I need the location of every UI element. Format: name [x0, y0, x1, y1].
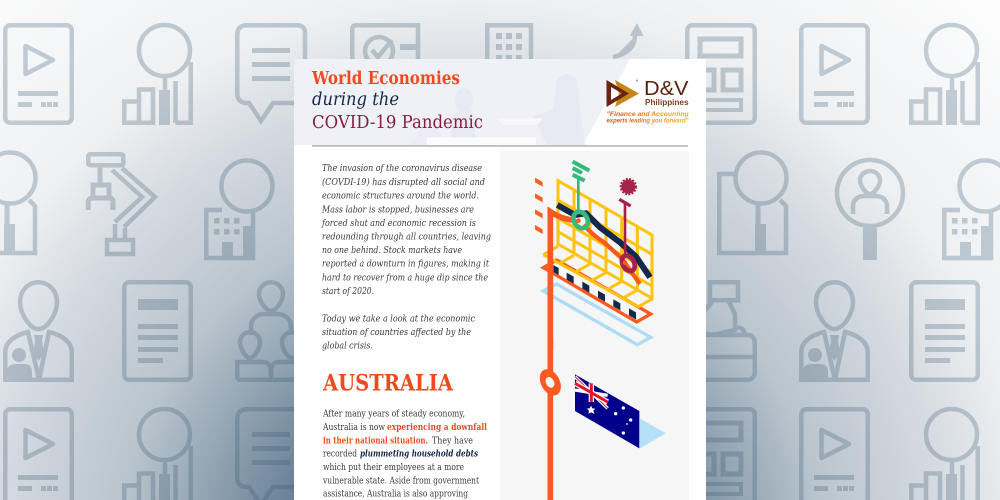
- icon: video document: [5, 25, 72, 123]
- Australia text block: recorded: [323, 450, 357, 460]
- intro text block: [321, 164, 491, 352]
- icon: video document right: [801, 25, 868, 123]
- icon: text document: [124, 282, 191, 380]
- intro text block: forced shut and economic recession is: [321, 219, 476, 229]
- icon: magnifier document left: [0, 152, 36, 253]
- intro text block: The invasion of the coronavirus disease: [322, 164, 482, 174]
- icon: layout document: [687, 25, 755, 123]
- orange path: [550, 212, 640, 350]
- Australia text block: Australia is now: [322, 423, 385, 433]
- icon: office building: [487, 25, 531, 123]
- green marker: [571, 162, 591, 231]
- intro text block: economic structures around the world.: [322, 192, 479, 202]
- icon: magnifier over building: [206, 160, 272, 260]
- Australia text block: which put their employees at a more: [323, 463, 464, 473]
- icon: text document right: [911, 282, 978, 380]
- icon: cashier at desk: [687, 282, 755, 380]
- orange timeline: [542, 340, 559, 500]
- intro text block: reported a downturn in figures, making it: [322, 260, 489, 270]
- icon: business person right: [801, 282, 868, 380]
- icon: magnifier over building right: [944, 160, 1000, 260]
- flag shadow: [640, 418, 666, 448]
- icon: speech bubble: [237, 25, 305, 121]
- Australia text block: vulnerable state. Aside from government: [322, 476, 479, 486]
- heading: Australia: AUSTRALIA: [322, 370, 454, 396]
- intro text block: hard to recover from a huge dip since the: [322, 273, 488, 283]
- intro text block: start of 2020.: [322, 287, 374, 297]
- title: [311, 69, 483, 133]
- Australia text block: plummeting household debts: [360, 450, 478, 460]
- Australia text block: [322, 410, 487, 500]
- logo: D&V Philippines: "Finance and Accounting: [607, 112, 689, 118]
- icon: rising arrow shaft: [613, 35, 635, 57]
- flag of Australia: [575, 374, 639, 448]
- light blue base outline: [543, 284, 651, 345]
- intro text block: Today we take a look at the economic: [322, 314, 475, 324]
- intro text block: redounding through all countries, leaving: [322, 233, 491, 243]
- icon: robot arm: [88, 154, 155, 254]
- intro text block: (COVDI-19) has disrupted all social and: [322, 177, 485, 188]
- icon: magnifier chart bottom: [124, 409, 191, 500]
- icon: magnifier chart right: [911, 25, 978, 125]
- icon: layout document bottom: [687, 409, 755, 500]
- intro text block: no one behind. Stock markets have: [322, 246, 462, 256]
- panel: header banner: [294, 59, 630, 145]
- logo: D&V Philippines: Philippines: [645, 97, 689, 107]
- logo: D&V Philippines: D&V: [644, 77, 689, 100]
- icon: rising arrow: [613, 23, 644, 59]
- icon: magnifier over person: [837, 160, 903, 260]
- intro text block: Mass labor is stopped, businesses are: [321, 205, 474, 215]
- intro text block: situation of countries affected by the: [322, 328, 471, 338]
- Australia text block: After many years of steady economy,: [322, 410, 465, 420]
- side dashes: [535, 178, 543, 234]
- logo: D&V Philippines: experts leading you forward": [606, 119, 689, 125]
- yellow grid and floor: [543, 181, 652, 307]
- icon: speech bubble bottom: [237, 409, 305, 500]
- logo: D&V Philippines: [606, 77, 689, 125]
- icon: video document bottom right: [801, 409, 868, 500]
- Australia text block: experiencing a downfall: [387, 423, 487, 433]
- header divider: [312, 145, 688, 147]
- Australia text block: in their national situation.: [323, 436, 428, 446]
- icon: checklist document: [352, 25, 418, 123]
- illustration: isometric stock chart: [535, 162, 652, 350]
- orange base outline with squares: [543, 260, 651, 322]
- icon: video document bottom: [5, 409, 72, 500]
- timeline ring: [536, 366, 565, 399]
- title: COVID-19 Pandemic: [312, 113, 483, 133]
- icon: magnifier over chart: [124, 25, 191, 125]
- panel: illustration column: [500, 151, 689, 500]
- title: during the: [312, 90, 399, 110]
- title: World Economies: [311, 69, 460, 89]
- maroon virus marker: [619, 179, 637, 273]
- icon: business person: [5, 282, 72, 380]
- navy trend line: [557, 205, 650, 277]
- illustration: timeline with Australian flag: [536, 340, 666, 500]
- icon: magnifier chart bottom right: [911, 409, 978, 500]
- Australia text block: assistance, Australia is also approving: [323, 490, 468, 500]
- icon: magnifier document right: [719, 152, 786, 253]
- intro text block: global crisis.: [322, 342, 373, 352]
- icon: group of people: [237, 282, 305, 380]
- Australia text block: They have: [432, 436, 473, 446]
- panel: infographic page: [294, 59, 706, 500]
